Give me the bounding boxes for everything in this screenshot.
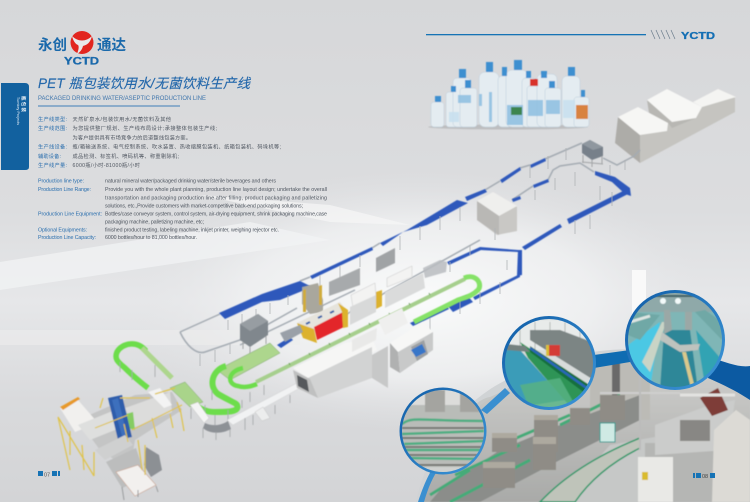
red labeling machine bbox=[297, 302, 348, 343]
english specification list: Production Line Equipment: bbox=[38, 212, 102, 218]
case packer and palletizer bbox=[58, 388, 184, 500]
small white building bbox=[477, 192, 517, 235]
chinese specification list: 成品检测、标签机、喷码机等、称重剔除机; bbox=[72, 152, 179, 160]
side tab: Turnkey Projects bbox=[16, 97, 20, 125]
english specification list: Optional Equipments: bbox=[38, 228, 87, 234]
white warehouse building bbox=[615, 89, 736, 163]
header rule and brand bbox=[426, 30, 715, 42]
chinese specification list: 生产线类型: bbox=[38, 115, 67, 123]
english specification list: natural mineral water/packaged drinking water/sterile beverages and others bbox=[105, 178, 276, 184]
logo: 通达 bbox=[97, 37, 126, 54]
english specification list: Production line type: bbox=[38, 178, 84, 184]
page number right: 08 bbox=[702, 474, 708, 480]
logo mark: red circle bbox=[70, 31, 94, 54]
yellow safety fencing bbox=[58, 388, 184, 476]
page number right bbox=[693, 473, 715, 480]
green conveyor: long line with curve bbox=[256, 277, 480, 382]
english specification list: Bottles/case conveyor system, control system, air-drying equipment, shrink packaging machine,case bbox=[105, 212, 327, 218]
gray panels and filler station bbox=[302, 248, 395, 314]
conveyor turntable and white roller line bbox=[190, 383, 300, 440]
english specification list: 6000 bottles/hour to 81,000 bottles/hour. bbox=[105, 235, 197, 241]
english specification list: packaging machine, palletizing machine, etc; bbox=[105, 220, 204, 226]
english specification list: Production Line Range: bbox=[38, 187, 91, 193]
large white tunnel machines bbox=[293, 308, 433, 398]
top gray machine bbox=[582, 140, 603, 167]
blue arc band bbox=[418, 462, 441, 502]
logo bbox=[38, 31, 126, 68]
conveyor network: gray links bbox=[180, 143, 640, 353]
logo: YCTD bbox=[64, 56, 99, 68]
english specification list bbox=[38, 178, 327, 241]
factory photo with arc frame bbox=[415, 349, 750, 502]
title: PET 瓶包装饮用水/无菌饮料生产线 bbox=[38, 76, 252, 91]
photo circle: conveyor rows bbox=[400, 388, 486, 474]
title bbox=[38, 76, 252, 106]
conveyor network: blue sections bbox=[219, 158, 631, 348]
chinese specification list: 生产线设备: bbox=[38, 142, 67, 150]
gray machine, lower line bbox=[240, 314, 268, 354]
white shrink machines bbox=[280, 260, 447, 342]
factory interior bbox=[415, 360, 750, 502]
chinese specification list: 6000瓶/小时-81000瓶/小时 bbox=[72, 161, 140, 169]
english specification list: Provide you with the whole plant planning, production line layout design; undertake the overall bbox=[105, 187, 327, 193]
chinese specification list: 天然矿泉水/包装饮用水/无菌饮料及其他 bbox=[72, 115, 171, 123]
green conveyor: bay and loop bbox=[116, 343, 280, 426]
english specification list: Production Line Capacity: bbox=[38, 235, 96, 241]
chinese specification list: 为客户提供具有市场竞争力的后道整线包装方案。 bbox=[72, 134, 191, 142]
side tab: 瓶包装 bbox=[20, 96, 27, 112]
chinese specification list: 瓶/箱输送系统、电气控制系统、吹水装置、热收缩膜包装机、纸箱包装机、码垛机等; bbox=[72, 142, 281, 150]
chinese specification list: 生产线范围: bbox=[38, 124, 67, 132]
chinese specification list bbox=[38, 115, 281, 169]
chinese specification list: 生产线产量: bbox=[38, 161, 67, 169]
logo: 永创 bbox=[38, 36, 67, 54]
photo circle: green conveyor and machines bbox=[502, 316, 596, 410]
title: PACKAGED DRINKING WATER/ASEPTIC PRODUCTION LINE bbox=[38, 95, 207, 102]
photo circle: blue packaging hall bbox=[625, 290, 725, 392]
english specification list: finished product testing, labeling machine, inkjet printer, weighing rejector etc. bbox=[105, 228, 279, 234]
english specification list: solutions, etc.,Provide customers with market-competitive back-end packaging solutions; bbox=[105, 204, 303, 210]
english specification list: transportation and packaging production line after filling, product packaging and palletizing bbox=[105, 196, 327, 202]
side tab bbox=[1, 83, 29, 170]
conveyor network: support legs bbox=[200, 148, 625, 366]
page number left bbox=[38, 471, 60, 478]
chinese specification list: 为您提供整厂规划、生产线布局设计;承接整体包装生产线; bbox=[72, 124, 217, 132]
bottle group bbox=[428, 60, 589, 130]
page number left: 07 bbox=[44, 472, 50, 478]
header rule and brand: YCTD bbox=[681, 31, 715, 42]
chinese specification list: 辅助设备: bbox=[38, 152, 61, 160]
